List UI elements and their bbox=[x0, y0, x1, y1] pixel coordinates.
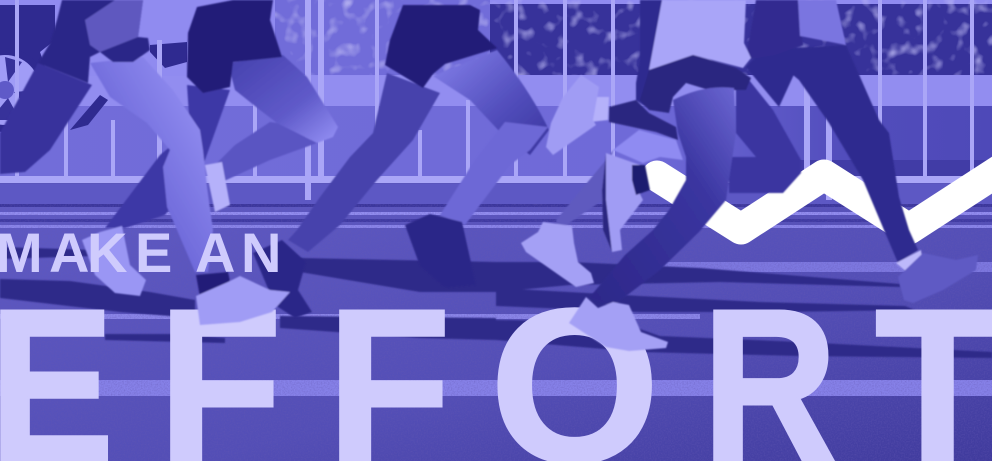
runner 5: shirt bbox=[649, 0, 751, 70]
fence bbox=[0, 0, 992, 200]
runner 5: front shoe bbox=[569, 297, 668, 351]
runner 1: rear leg bbox=[0, 63, 92, 174]
parked car bbox=[0, 5, 187, 132]
runner 3: shorts bbox=[385, 5, 497, 88]
runner 2: shin bbox=[215, 122, 317, 182]
big word: EFFORT bbox=[0, 263, 992, 461]
runner 1: front leg bbox=[90, 57, 213, 272]
runner 2: rear shoe bbox=[82, 226, 146, 296]
road line bbox=[0, 380, 992, 396]
runner 5: rear leg bbox=[729, 80, 801, 193]
heading: MAKE AN: A bbox=[49, 221, 89, 284]
heading: MAKE AN: K bbox=[87, 221, 127, 284]
heading: MAKE AN: A bbox=[195, 221, 235, 284]
runner 1: shorts highlight bbox=[85, 0, 143, 52]
runner 3: front shoe bbox=[405, 214, 476, 288]
foliage bbox=[275, 0, 992, 75]
runner 2: rear leg bbox=[105, 85, 230, 228]
runner shadows bbox=[0, 247, 992, 358]
runner 6: far right bbox=[745, 0, 978, 303]
runner 2: front thigh bbox=[228, 55, 338, 143]
runner 2: shorts bbox=[187, 0, 282, 93]
road grain bbox=[0, 204, 992, 461]
runner 3: rear leg bbox=[288, 73, 440, 252]
runners bbox=[0, 0, 978, 351]
runner 3: rear shoe bbox=[253, 240, 312, 318]
zigzag line graphic bbox=[657, 170, 992, 229]
runner 3: front thigh bbox=[433, 50, 549, 155]
runner 1: shoe bbox=[196, 276, 290, 325]
runner 5: front leg bbox=[589, 87, 736, 306]
heading: MAKE AN: E bbox=[135, 221, 172, 284]
runner 4: rear legs and shoes bbox=[521, 0, 683, 287]
runner 1: sock bbox=[196, 272, 231, 297]
heading: MAKE AN: N bbox=[241, 221, 281, 284]
runner 5: shorts bbox=[640, 55, 751, 113]
runner 2: sock bbox=[205, 162, 230, 212]
runner 3: shin bbox=[440, 122, 548, 225]
runner 1: shorts bbox=[38, 0, 150, 83]
